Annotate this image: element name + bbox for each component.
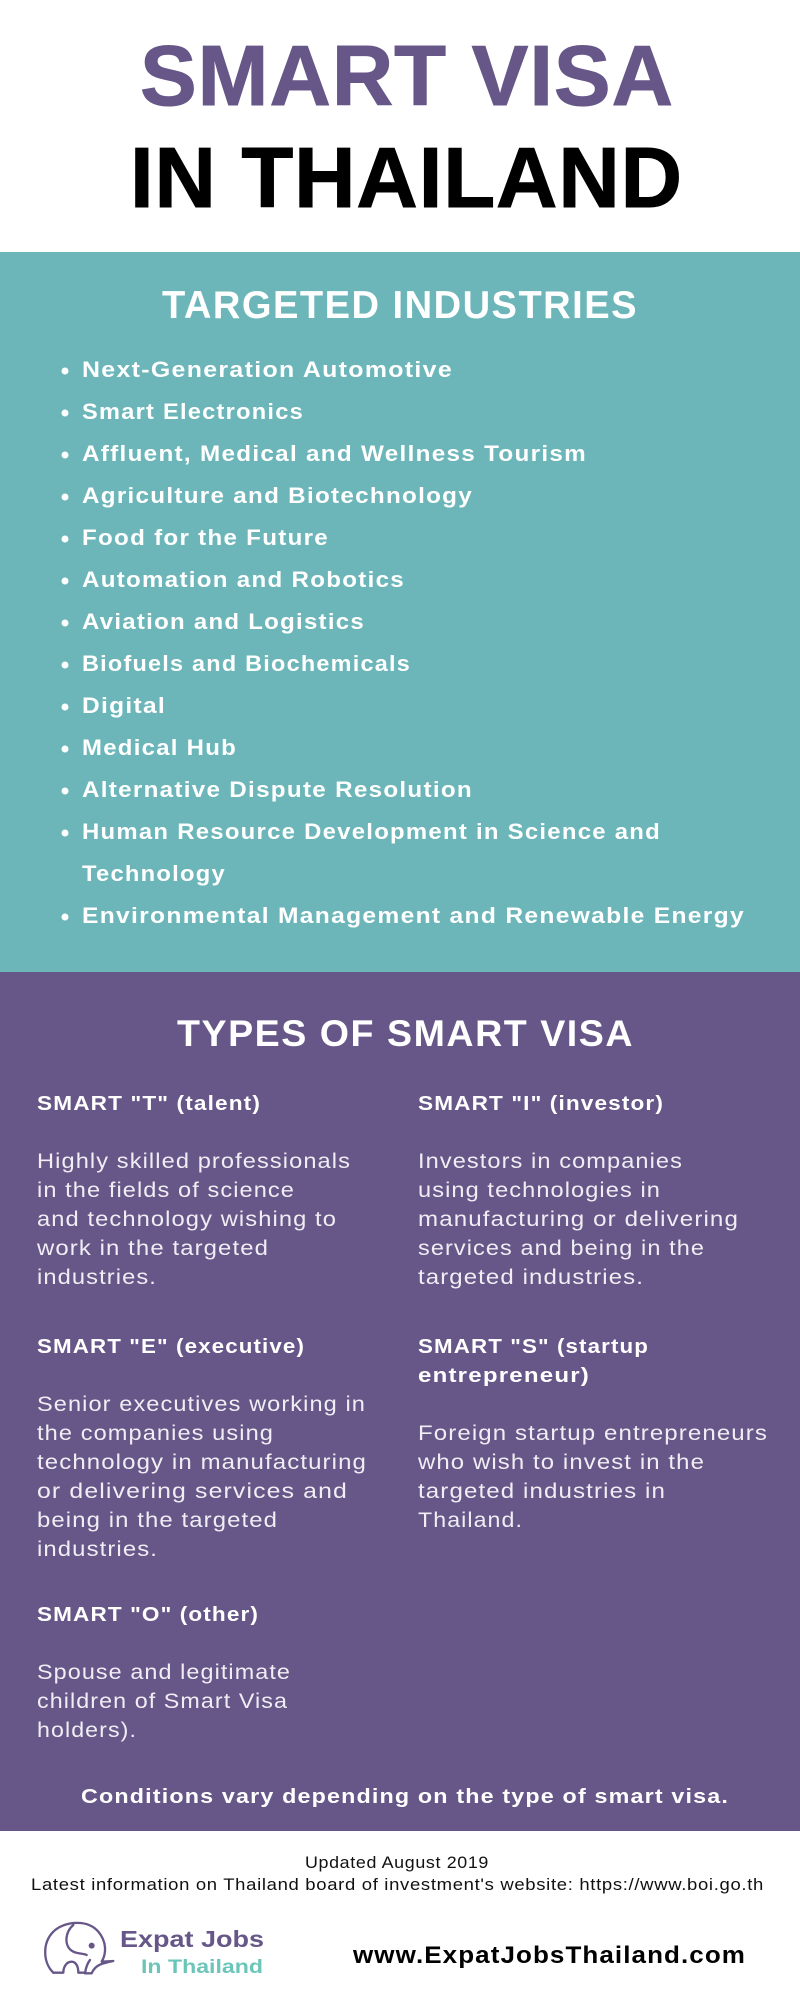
visa type: E: SMART "E" (executive)	[37, 1336, 305, 1358]
visa type: E	[37, 1336, 367, 1561]
visa type: I: targeted industries.	[418, 1265, 644, 1289]
visa type: O: SMART "O" (other)	[37, 1604, 259, 1626]
logo: expat jobs in thailand: In Thailand	[141, 1956, 263, 1978]
visa type: O	[37, 1604, 291, 1742]
update note	[31, 1854, 764, 1894]
panel: types of smart visa	[0, 972, 800, 1831]
visa type: E: technology in manufacturing	[37, 1450, 367, 1474]
logo wordmark: Expat Jobs	[120, 1926, 264, 1952]
industries list: Agriculture and Biotechnology	[82, 483, 473, 508]
visa type: I: Investors in companies	[418, 1149, 683, 1173]
visa type: O: children of Smart Visa	[37, 1689, 288, 1713]
visa type: E: or delivering services and	[37, 1479, 348, 1503]
visa type: I: using technologies in	[418, 1178, 661, 1202]
visa type: T: and technology wishing to	[37, 1207, 337, 1231]
industries list: Environmental Management and Renewable Energy	[82, 903, 745, 928]
visa type: E: being in the targeted	[37, 1508, 278, 1532]
visa type: S: Thailand.	[418, 1508, 523, 1532]
industries list: Technology	[82, 861, 226, 886]
industries list: Biofuels and Biochemicals	[82, 651, 411, 676]
logo: expat jobs in thailand	[45, 1923, 264, 1978]
visa type: S: entrepreneur)	[418, 1365, 590, 1387]
visa type: T: work in the targeted	[36, 1236, 269, 1260]
conditions note: Conditions vary depending on the type of smart visa.	[81, 1786, 729, 1808]
title: SMART VISA	[140, 29, 673, 124]
visa type: S	[417, 1336, 768, 1532]
visa type: T: industries.	[37, 1265, 157, 1289]
industries list: Smart Electronics	[82, 399, 304, 424]
industries list: Digital	[82, 693, 166, 718]
update note: Updated August 2019	[305, 1854, 489, 1872]
visa type: O: Spouse and legitimate	[37, 1660, 291, 1684]
visa type: O: holders).	[37, 1718, 137, 1742]
visa type: I: manufacturing or delivering	[418, 1207, 739, 1231]
industries list: Aviation and Logistics	[82, 609, 365, 634]
title: IN THAILAND	[130, 131, 682, 226]
visa type: I: services and being in the	[418, 1236, 705, 1260]
industries list: Medical Hub	[82, 735, 237, 760]
visa type: E: industries.	[37, 1537, 158, 1561]
industries list: Human Resource Development in Science and	[82, 819, 661, 844]
industries list: Next-Generation Automotive	[82, 357, 453, 382]
visa type: T: in the fields of science	[37, 1178, 295, 1202]
visa type: I	[418, 1093, 739, 1289]
title	[130, 29, 682, 226]
visa type: S: SMART "S" (startup	[418, 1336, 649, 1358]
heading: targeted industries: TARGETED INDUSTRIES	[162, 284, 638, 327]
industries list: Affluent, Medical and Wellness Tourism	[82, 441, 587, 466]
visa type: E: Senior executives working in	[37, 1392, 366, 1416]
industries list: Alternative Dispute Resolution	[82, 777, 473, 802]
panel: targeted industries	[0, 252, 800, 972]
update note: Latest information on Thailand board of investment's website: https://www.boi.go.th	[31, 1876, 764, 1894]
heading: types of smart visa: TYPES OF SMART VISA	[177, 1013, 634, 1054]
visa type: E: the companies using	[37, 1421, 274, 1445]
visa type: S: targeted industries in	[418, 1479, 666, 1503]
industries list	[62, 357, 745, 928]
industries list: Automation and Robotics	[82, 567, 405, 592]
industries list: Food for the Future	[82, 525, 329, 550]
icon: elephant	[45, 1923, 113, 1973]
visa type: I: SMART "I" (investor)	[418, 1093, 664, 1115]
visa type: S: Foreign startup entrepreneurs	[418, 1421, 768, 1445]
visa type: T	[36, 1093, 351, 1289]
website url: www.ExpatJobsThailand.com	[352, 1942, 746, 1969]
visa type: T: SMART "T" (talent)	[37, 1093, 261, 1115]
visa type: S: who wish to invest in the	[417, 1450, 705, 1474]
visa type: T: Highly skilled professionals	[37, 1149, 351, 1173]
